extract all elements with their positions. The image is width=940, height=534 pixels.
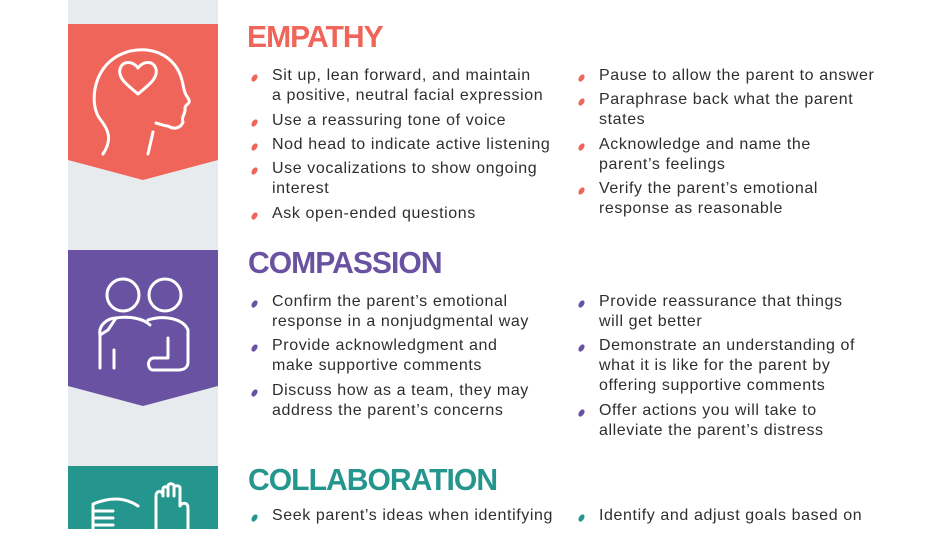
- list: empathy bullets: parent’s feelings: [599, 156, 725, 173]
- list: empathy bullets: interest: [272, 180, 329, 197]
- list: empathy bullets: response as reasonable: [599, 200, 783, 217]
- list: compassion bullets: [251, 293, 855, 439]
- icon: hands: [93, 484, 188, 529]
- list: compassion bullets: offering supportive comments: [599, 377, 825, 394]
- list: compassion bullets: Offer actions you will take to: [599, 402, 817, 419]
- list: empathy bullets: Acknowledge and name the: [599, 136, 811, 153]
- icon: two people: [100, 279, 188, 370]
- list: empathy bullets: Pause to allow the parent to answer: [599, 67, 874, 84]
- panel: empathy icon banner: [68, 24, 218, 180]
- heading: empathy: EMPATHY: [247, 19, 383, 54]
- gray side column: [68, 0, 218, 529]
- list: compassion bullets: Provide acknowledgment and: [272, 337, 498, 354]
- list: compassion bullets: make supportive comments: [272, 357, 482, 374]
- list: collaboration bullets: Identify and adjust goals based on: [599, 507, 862, 524]
- list: compassion bullets: what it is like for the parent by: [599, 357, 830, 374]
- list: empathy bullets: a positive, neutral facial expression: [272, 87, 543, 104]
- list: empathy bullets: Paraphrase back what the parent: [599, 91, 853, 108]
- list: compassion bullets: address the parent’s concerns: [272, 402, 503, 419]
- list: empathy bullets: states: [599, 111, 645, 128]
- list: compassion bullets: Demonstrate an understanding of: [599, 337, 855, 354]
- list: empathy bullets: Nod head to indicate active listening: [272, 136, 550, 153]
- list: empathy bullets: Ask open-ended questions: [272, 205, 476, 222]
- list: empathy bullets: Use vocalizations to show ongoing: [272, 160, 537, 177]
- list: empathy bullets: Verify the parent’s emotional: [599, 180, 818, 197]
- list: collaboration bullets: Seek parent’s ideas when identifying: [272, 507, 553, 524]
- heading: collaboration: COLLABORATION: [248, 462, 497, 497]
- list: compassion bullets: response in a nonjudgmental way: [272, 313, 529, 330]
- list: compassion bullets: alleviate the parent’s distress: [599, 422, 824, 439]
- list: compassion bullets: will get better: [599, 313, 702, 330]
- list: compassion bullets: Confirm the parent’s emotional: [272, 293, 508, 310]
- list: collaboration bullets: [251, 507, 862, 524]
- panel: collaboration icon banner: [68, 466, 218, 529]
- list: empathy bullets: Use a reassuring tone of voice: [272, 112, 506, 129]
- list: empathy bullets: [251, 67, 874, 222]
- list: compassion bullets: Discuss how as a team, they may: [272, 382, 529, 399]
- list: empathy bullets: Sit up, lean forward, and maintain: [272, 67, 531, 84]
- icon: head with heart: [94, 50, 189, 154]
- list: compassion bullets: Provide reassurance that things: [599, 293, 843, 310]
- heading: compassion: COMPASSION: [248, 245, 442, 280]
- panel: compassion icon banner: [68, 250, 218, 406]
